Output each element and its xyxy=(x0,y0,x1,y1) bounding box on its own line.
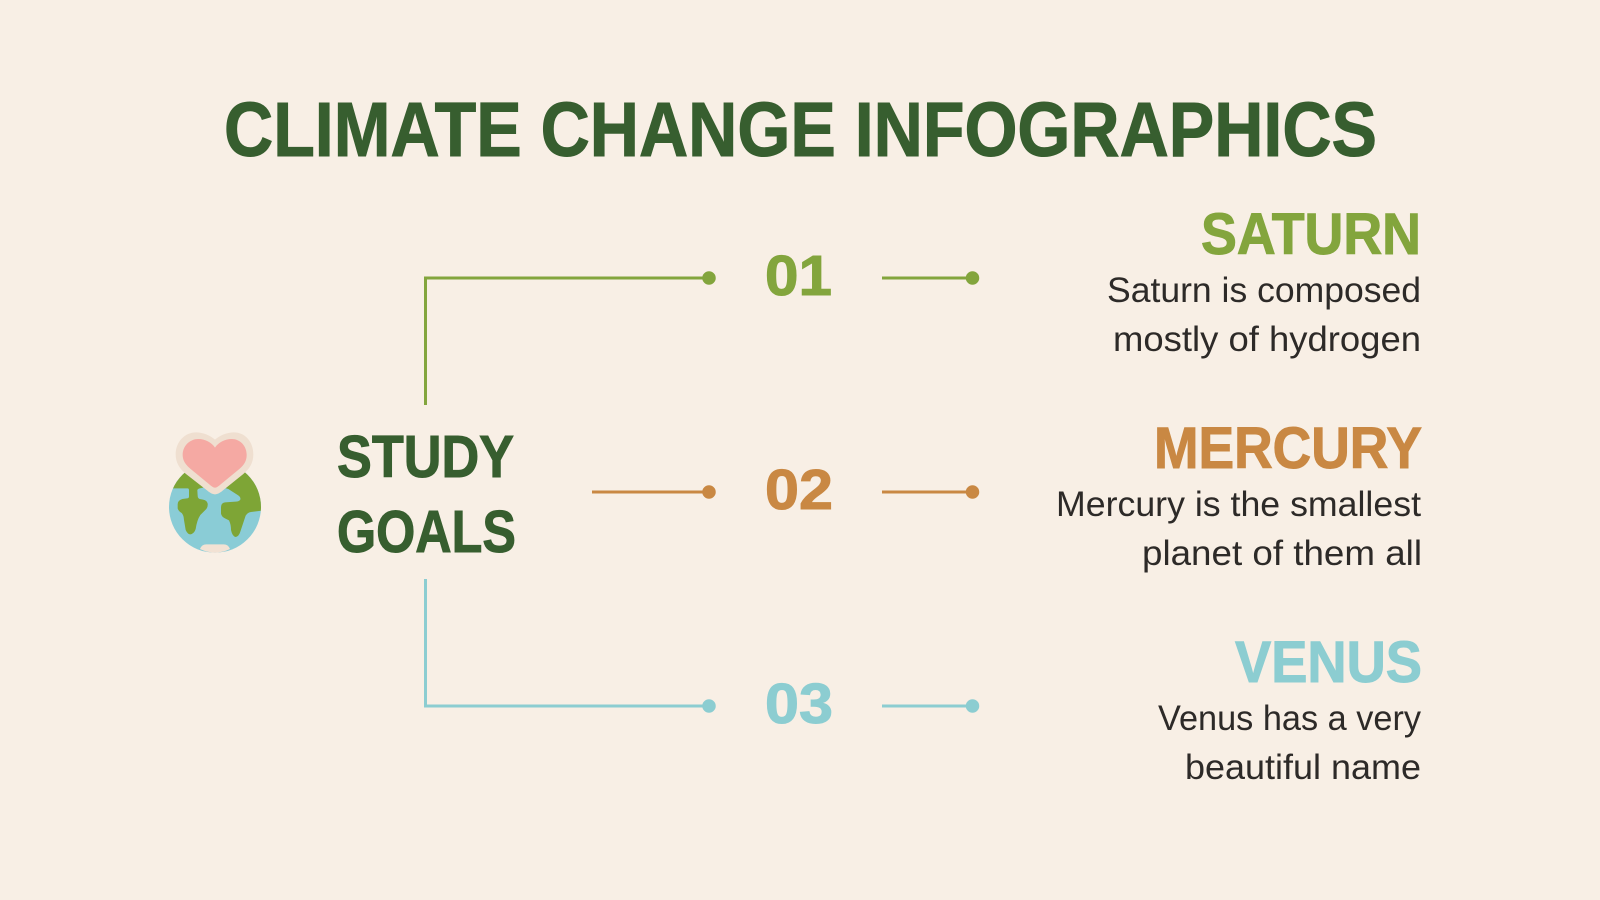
number 02: 02 xyxy=(765,458,833,522)
description: Mercury: Mercury is the smallest xyxy=(1056,485,1421,524)
description: Saturn: Saturn is composed xyxy=(1107,271,1421,310)
icon: earth with heart xyxy=(165,432,265,553)
number 01: 01 xyxy=(765,244,832,308)
item: Mercury xyxy=(1056,416,1422,573)
item: Saturn xyxy=(1107,202,1421,359)
number 03: 03 xyxy=(765,672,833,736)
description: Venus xyxy=(1158,699,1421,787)
heart xyxy=(176,432,253,494)
center label: study goals: STUDY xyxy=(337,424,514,490)
item: Venus xyxy=(1158,630,1422,787)
connector 02 xyxy=(592,486,978,498)
center label: study goals: GOALS xyxy=(337,499,516,565)
globe xyxy=(169,472,261,553)
center label: study goals xyxy=(337,424,516,565)
heading: Saturn: SATURN xyxy=(1201,202,1421,267)
heading: Venus: VENUS xyxy=(1235,630,1422,695)
description: Saturn xyxy=(1107,271,1421,359)
description: Saturn: mostly of hydrogen xyxy=(1113,320,1421,359)
description: Mercury xyxy=(1056,485,1422,573)
connector 01 xyxy=(426,272,978,405)
description: Venus: Venus has a very xyxy=(1158,699,1421,738)
description: Venus: beautiful name xyxy=(1185,748,1421,787)
title: CLIMATE CHANGE INFOGRAPHICS xyxy=(224,87,1377,173)
heading: Mercury: MERCURY xyxy=(1154,416,1422,481)
connector 03 xyxy=(426,579,978,712)
description: Mercury: planet of them all xyxy=(1142,534,1422,573)
